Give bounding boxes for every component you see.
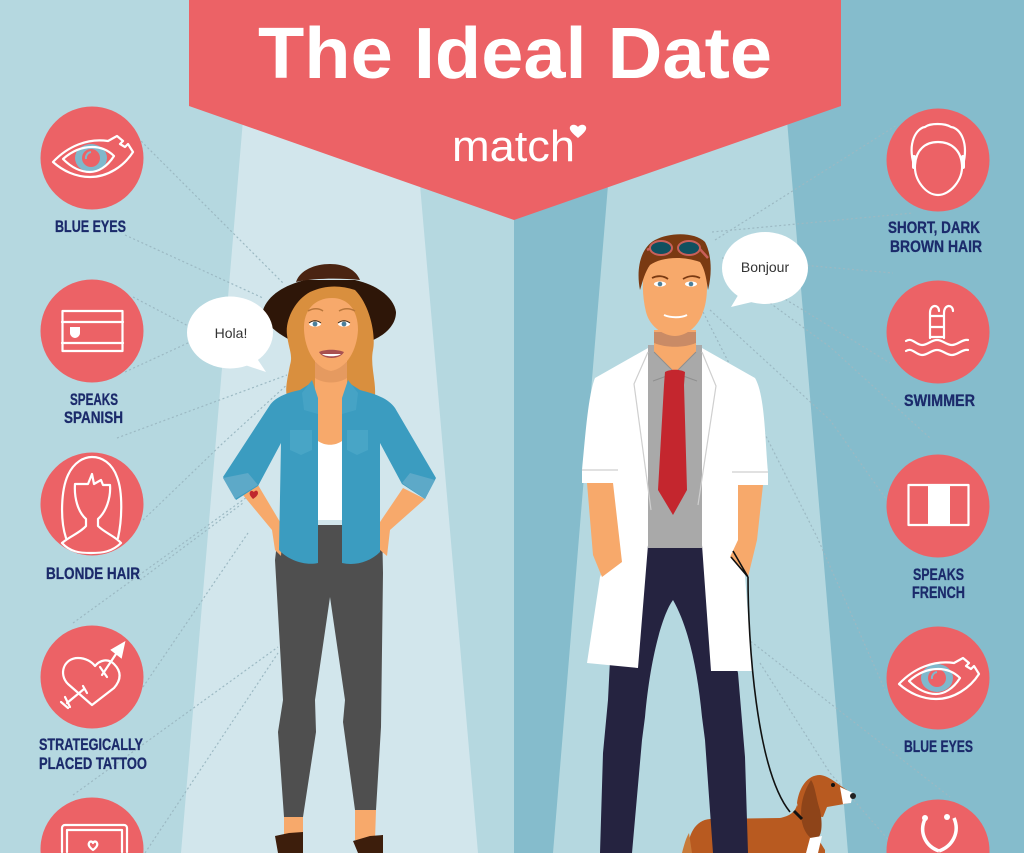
label: speaks French: FRENCH (912, 583, 965, 602)
speech bubble: Hola (187, 296, 273, 372)
man's hair (639, 234, 711, 290)
dog tail (682, 833, 692, 853)
man's shirt (648, 345, 702, 548)
right icon: short dark brown hair (886, 108, 990, 212)
label: speaks French (912, 565, 965, 602)
man's trousers (600, 545, 748, 853)
lapel lines (582, 352, 768, 510)
woman's ankles (284, 810, 376, 840)
shirt collar (653, 352, 697, 381)
label: speaks Spanish: SPEAKS (70, 390, 118, 409)
hat brim (263, 280, 396, 342)
sunglasses on head (647, 241, 708, 258)
label: strategically placed tattoo: STRATEGICALLY (39, 735, 143, 754)
dog body (687, 805, 825, 853)
man's eyes and brows (652, 276, 700, 287)
figure: dog (682, 775, 856, 853)
label: short, dark brown hair: BROWN HAIR (890, 237, 982, 256)
title: The Ideal Date (258, 14, 772, 94)
label: short, dark brown hair (888, 218, 982, 256)
man's face (643, 257, 707, 336)
man's mouth (664, 315, 687, 317)
dog ear (801, 780, 822, 840)
label: blue eyes: BLUE EYES (55, 217, 126, 236)
neck shadow (654, 332, 696, 347)
right icon: French flag (886, 454, 990, 558)
dog head (797, 775, 850, 817)
dog leash (731, 551, 790, 812)
dog chest (806, 836, 822, 853)
lab coat right panel (702, 348, 768, 671)
man's neck (654, 330, 696, 373)
label: blue eyes right: BLUE EYES (904, 737, 973, 756)
left icon: heart tattoo (40, 626, 144, 728)
dog collar (794, 811, 802, 819)
right icon: stethoscope (886, 799, 990, 853)
woman's face (304, 298, 358, 371)
label: speaks Spanish (64, 390, 123, 427)
neck shadow (315, 362, 347, 382)
speech bubble: Hola: Hola! (215, 325, 247, 341)
label: speaks French: SPEAKS (913, 565, 964, 584)
woman's boots (275, 832, 383, 853)
label: strategically placed tattoo (39, 735, 147, 773)
header banner (189, 0, 841, 220)
woman's neck and chest (315, 360, 347, 445)
speech bubble: Bonjour (722, 232, 808, 307)
dog muzzle (840, 787, 853, 804)
left icon: Spanish flag (40, 280, 144, 382)
figure: man (582, 234, 790, 853)
woman's hair (286, 286, 375, 396)
woman's mouth (319, 350, 344, 358)
denim jacket (223, 383, 436, 564)
label: speaks Spanish: SPANISH (64, 408, 123, 427)
man's arms and hands (587, 483, 763, 577)
jacket cuffs (223, 473, 435, 499)
woman's forearms (243, 485, 425, 556)
dog nose and eye (831, 783, 856, 799)
left icon: laptop (40, 797, 143, 853)
tattoo heart (250, 491, 258, 499)
woman's trousers (275, 525, 383, 817)
label: blonde hair: BLONDE HAIR (46, 564, 140, 583)
left icon: blonde hair (40, 452, 144, 556)
match logo: match (452, 122, 575, 171)
lab coat left panel (582, 348, 648, 668)
woman's eyes and brows (308, 309, 355, 327)
right icon: swimmer (886, 280, 990, 384)
necktie (658, 370, 687, 515)
left icon: blue eyes (40, 106, 144, 210)
dotted connector lines (73, 125, 950, 853)
figure: woman (223, 264, 436, 853)
jacket collars (302, 380, 358, 414)
white top (318, 441, 342, 520)
label: short, dark brown hair: SHORT, DARK (888, 218, 981, 237)
right icon: blue eyes (886, 626, 990, 730)
label: swimmer: SWIMMER (904, 391, 975, 410)
label: strategically placed tattoo: PLACED TATTOO (39, 754, 147, 773)
speech bubble: Bonjour: Bonjour (741, 259, 789, 275)
jacket pockets (290, 430, 368, 455)
hat crown (296, 264, 360, 282)
